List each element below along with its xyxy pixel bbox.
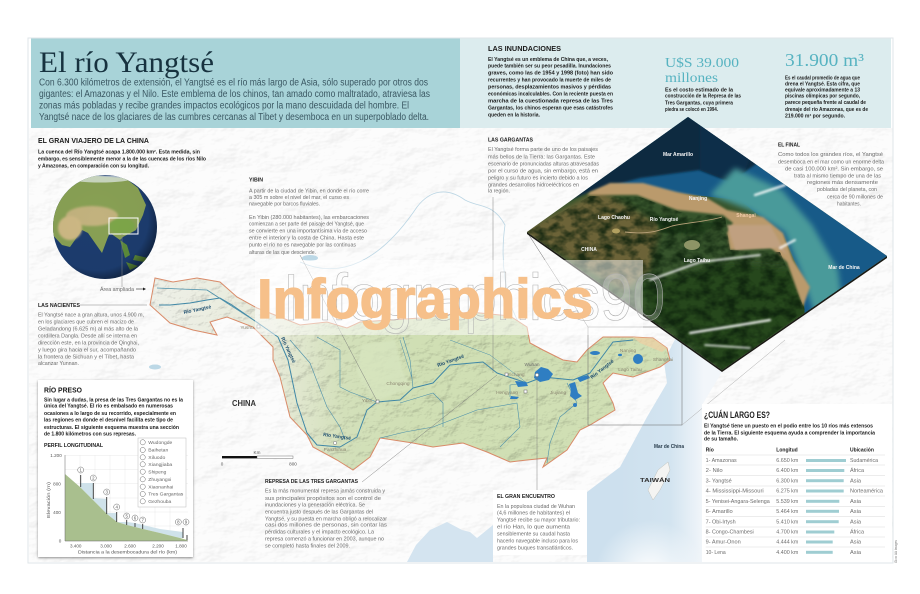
lakes (510, 351, 643, 407)
text: El final (778, 143, 884, 207)
city labels: Jiujiang (550, 390, 566, 396)
text: Las nacientes: la frontera de Sichuan y el Tíbet, hasta (38, 354, 134, 360)
panel: El gran encuentro: grandes buques transatlánticos. (497, 546, 573, 552)
text: Las nacientes: El Yangtsé nace a gran altura, unos 4.900 m, (38, 312, 144, 318)
text: Las nacientes: dirección este, en la provincia de Qinghai, (38, 340, 139, 346)
dam numbers: 3 (105, 490, 108, 495)
panel: El gran encuentro: Yangtsé recibe su mayor tributario: (497, 518, 580, 524)
text: El final: desemboca en el mar como un enorme delta (778, 160, 884, 166)
text: Las nacientes: en los glaciares que cubren el macizo de (38, 320, 134, 326)
intro text (39, 78, 430, 123)
panel: ¿Cuán largo es?: de la Tierra. El siguiente esquema ayuda a comprender la importancia (704, 430, 875, 436)
panel: Las inundaciones: económicas incalculables. Con la reciente puesta en (488, 91, 613, 97)
dams (81, 475, 187, 540)
panel: cost of the dam (665, 56, 741, 113)
panel: Las inundaciones: puede también ser su peor pesadilla. Inundaciones (488, 64, 611, 70)
table of rivers: Ubicación (850, 448, 874, 454)
satellite labels: Nanjing (689, 196, 707, 202)
panel: Las inundaciones: graves, como las de 1954 y 1998 (foto) han sido (488, 70, 613, 76)
table of rivers: 6.275 km (776, 489, 798, 495)
panel: average flow: equivale aproximadamente a 13 (785, 87, 860, 93)
satellite labels: Río Yangtsé (650, 217, 678, 223)
Yangtsé basin outline (150, 278, 670, 470)
table of rivers: 7- Obi-Irtysh (706, 519, 736, 525)
text: Las nacientes: y luego gira hacia el sur, acompañando (38, 347, 136, 353)
intro text: gigantes: el Amazonas y el Nilo. Este emblema de los chinos, tan amado como maltratado, atraviesa las (39, 89, 430, 100)
dam legend: Baihetan (148, 448, 169, 453)
table of rivers: 8- Congo-Chambesi (706, 530, 754, 536)
watermark: Infographics90 (283, 260, 665, 334)
panel: El gran encuentro (493, 490, 587, 555)
table of rivers: 4.400 km (776, 550, 798, 556)
dam numbers: 4 (115, 505, 118, 510)
delta inset frame (527, 232, 785, 425)
text: Las gargantas: peligro y su futuro es incierto debido a los (488, 176, 588, 182)
city labels: Chongqing (386, 381, 410, 387)
table of rivers: Norteamérica (850, 489, 883, 495)
axis labels: 3.400 (70, 544, 82, 548)
city labels: Yibin (362, 398, 373, 404)
enlarged area rectangle (109, 218, 138, 234)
panel: cost of the dam: U$S 39.000 (665, 56, 739, 71)
panel: average flow: Es el caudal promedio de agua que (785, 75, 860, 81)
Sichuan plain (356, 345, 410, 398)
table of rivers: 1- Amazonas (706, 458, 737, 464)
satellite photo (527, 117, 887, 370)
dam legend: Gezhouba (148, 499, 172, 504)
text: Las gargantas: escenario de pronunciadas alturas atravesadas (488, 161, 599, 167)
text: Yibin: navegable por barcos fluviales. (249, 201, 320, 207)
text: Represa de las Tres Gargantas: Yangtsé, y su puesta en marcha obligó a relocalizar (265, 516, 387, 522)
text: El final: regiones más densamente (807, 180, 878, 186)
panel: El gran encuentro: sensiblemente su caudal hasta (497, 532, 570, 538)
text: Represa de las Tres Gargantas: encuentra justo después de las Gargantas del (265, 509, 373, 515)
dam legend: Tres Gargantas (148, 492, 184, 497)
table of rivers: Asia (850, 540, 861, 546)
city labels: Lago Taihu (618, 367, 642, 373)
panel: ¿Cuán largo es? (702, 404, 892, 563)
dam numbers (78, 467, 189, 525)
table of rivers: 5.410 km (776, 519, 798, 525)
longitudinal profile chart (46, 453, 189, 554)
text: Las nacientes: Geladandong (6.625 m) al más alto de la (38, 326, 138, 332)
axis labels: 0 (59, 538, 62, 544)
text: Las gargantas: más bellos de la Tierra: las Gargantas. Este (488, 154, 595, 160)
panel: Río preso (38, 380, 193, 557)
satellite labels: Lago Taihu (684, 258, 710, 264)
label: China: CHINA (232, 399, 256, 408)
table of rivers: Asia (850, 499, 861, 505)
photo credit: Glow AA Images (894, 540, 898, 563)
axes (65, 455, 188, 541)
lake and upper river outside basin (149, 192, 520, 370)
axis labels: 3.000 (100, 544, 112, 548)
text: Yibin: A partir de la ciudad de Yibin, en donde el río corre (249, 188, 369, 194)
text: El final: Como todos los grandes ríos, el Yangtsé (778, 152, 883, 158)
dam numbers: 7 (141, 518, 144, 523)
basin border (150, 278, 670, 470)
dam numbers: 1 (79, 468, 82, 473)
river labels: Río Yangtsé (437, 354, 465, 369)
panel: average flow: parece pequeña frente al caudal de (785, 100, 866, 106)
panel: Las inundaciones: LAS INUNDACIONES (488, 44, 561, 53)
satellite image block (527, 117, 887, 372)
panel: cost of the dam: Es el costo estimado de la (665, 87, 733, 93)
table of rivers: 6.300 km (776, 478, 798, 484)
scale bar: Km (254, 450, 261, 455)
satellite labels: Lago Chaohu (598, 215, 630, 221)
text: Yibin: a 305 m sobre el nivel del mar, el curso es (249, 195, 349, 201)
label: enlarged area (100, 234, 146, 293)
table of rivers: Asia (850, 478, 861, 484)
panel: cost of the dam: piedra se colocó en 1994. (665, 107, 719, 113)
panel: El gran encuentro: EL GRAN ENCUENTRO (497, 494, 555, 500)
text: Las gargantas: El Yangtsé forma parte de uno de los paisajes (488, 147, 598, 153)
text: Las nacientes: alcanzar Yunnan. (38, 361, 79, 367)
text: Represa de las Tres Gargantas: casi dos millones de personas, sin contar las (265, 523, 387, 529)
intro text: Con 6.300 kilómetros de extensión, el Yangtsé es el río más largo de Asia, sólo superado por otros dos (39, 78, 428, 88)
text: Yibin: se convierte en una importantísima vía de acceso (249, 228, 367, 234)
panel: average flow: 31.900 m³ (785, 50, 865, 70)
dam numbers: 5 (125, 514, 128, 519)
river labels: Río Yangtsé (279, 336, 297, 364)
rivers (157, 288, 633, 463)
table of rivers: Río (706, 448, 714, 454)
header panel: title (31, 38, 460, 128)
river labels: Río Yangtsé (183, 304, 212, 316)
panel: Las inundaciones (488, 44, 613, 118)
text: Las gargantas: la región. (488, 189, 510, 195)
city labels: Yushu (240, 325, 254, 331)
text: Yibin: alturas de las que desciende. (249, 250, 316, 256)
axis labels: 1.800 (175, 544, 187, 548)
text: Represa de las Tres Gargantas (265, 479, 387, 550)
dam numbers: 6 (134, 516, 137, 521)
dam numbers: 2 (92, 476, 95, 481)
dam legend: Xiluodo (148, 455, 166, 460)
river labels: Río Yangtsé (323, 432, 351, 442)
header panel: data (460, 38, 891, 128)
text: Yibin (249, 178, 369, 256)
intro text: zonas más pobladas y recibe grandes impactos ecológicos por la mano descuidada del hombre. El (39, 100, 409, 112)
dam legend: Xiangjiaba (148, 462, 173, 467)
axis labels: 2.200 (152, 544, 164, 548)
axis labels: 1.200 (50, 453, 62, 458)
section: El gran viajero de la China: La cuenca del Río Yangtsé acapa 1.800.000 km². Esta medida, sin (38, 150, 200, 156)
axis labels: Distancia a la desembocadura del río (km) (78, 550, 178, 554)
text: El final: habitantes. (837, 201, 861, 207)
panel: El gran encuentro: (4,6 millones de habitantes) el (497, 511, 570, 517)
text: El final: EL FINAL (778, 143, 801, 149)
text: El final: cerca de 90 millones de (827, 194, 883, 200)
text: Las nacientes (38, 303, 144, 367)
title: El río Yangtsé (39, 46, 214, 79)
panel: Las inundaciones: Gargantas, los chinos esperan que esas catástrofes (488, 105, 613, 111)
text: Las nacientes: cordillera Dangla. Desde allí se interna en (38, 333, 137, 339)
delta region (633, 337, 667, 352)
label: Taiwán: TAIWÁN (640, 477, 671, 484)
text: Las nacientes: LAS NACIENTES (38, 303, 81, 309)
table of rivers: Longitud (776, 448, 798, 454)
panel: ¿Cuán largo es?: El Yangtsé tiene un puesto en el podio entre los 10 ríos más extensos (704, 423, 873, 429)
text: Yibin: En Yibin (280.000 habitantes), las embarcaciones (249, 215, 369, 221)
dam numbers: 9 (185, 520, 188, 525)
section: El gran viajero de la China: EL GRAN VIAJERO DE LA CHINA (38, 136, 149, 145)
text: Yibin: punto el río no es navegable por las continuas (249, 243, 356, 249)
dam numbers: 8 (177, 520, 180, 525)
table of rivers: Asia (850, 550, 861, 556)
panel: Las inundaciones: recurrentes y han provocado la muerte de miles de (488, 77, 611, 83)
table of rivers: Asia (850, 509, 861, 515)
panel: average flow (785, 50, 868, 119)
text: Las gargantas: por el curso de agua, sin embargo, está en (488, 169, 598, 175)
table of rivers: 6.400 km (776, 468, 798, 474)
text: Yibin: comienzan a ser parte del paisaje del Yangtsé, que (249, 222, 364, 228)
river labels (183, 304, 615, 442)
panel: Río preso: de 1.800 kilómetros con sus represas. (44, 432, 137, 438)
dam legend (138, 438, 186, 507)
map: basin of the Yangtsé (29, 128, 893, 562)
panel: El gran encuentro: hacerlo navegable incluso para los (497, 539, 578, 545)
text: Represa de las Tres Gargantas: inundaciones y la generación eléctrica. Se (265, 502, 365, 508)
text: Yibin: entre el interior y la costa de China. Hasta este (249, 236, 364, 242)
table of rivers: Asia (850, 519, 861, 525)
table of rivers: 4.444 km (776, 540, 798, 546)
city labels: Shanghai (653, 357, 673, 363)
city labels: Yichang (507, 372, 525, 378)
satellite land texture (527, 196, 805, 372)
panel: Río preso: estructuras. El siguiente esquema muestra una sección (44, 425, 179, 431)
island: Taiwan (648, 462, 670, 500)
label: Mar de China: Mar de China (654, 444, 684, 450)
panel: Río preso: única del Yangtsé. El río es embalsado en numerosas (44, 404, 173, 410)
panel: average flow: 219.000 m³ por segundo. (785, 113, 846, 119)
city labels: Panzhihua (324, 447, 347, 453)
text: Las gargantas (488, 138, 599, 195)
city labels: Nanjing (620, 348, 636, 354)
watermark: Infographics (257, 267, 593, 330)
axis labels: 2.600 (124, 544, 136, 548)
table of rivers: 4- Mississippi-Missouri (706, 489, 764, 495)
section: El gran viajero de la China (38, 136, 206, 170)
table of rivers: 5.539 km (776, 499, 798, 505)
panel: Las inundaciones: El Yangtsé es un emblema de China que, a veces, (488, 57, 609, 63)
text: El final: trata al mismo tiempo de una de las (794, 174, 881, 180)
text: Represa de las Tres Gargantas: se completó hasta finales del 2009. (265, 544, 350, 550)
satellite labels: Mar de China (828, 265, 860, 271)
city labels (240, 325, 673, 453)
table of rivers (706, 448, 885, 556)
panel: Río preso: las regiones en donde el desnivel facilita este tipo de (44, 418, 173, 424)
intro text: Yangtsé nace de los glaciares de las cumbres cercanas al Tibet y desemboca en un superpoblado delta. (39, 112, 429, 123)
panel: average flow: drenaje del río Amazonas, que es de (785, 107, 868, 113)
text: Represa de las Tres Gargantas: Es la más monumental represa jamás construida y (265, 489, 385, 495)
panel: Las inundaciones: personas, desplazamientos masivos y pérdidas (488, 84, 611, 90)
table of rivers: 5- Yenisei-Angara-Selenga (706, 499, 770, 505)
text: Las gargantas: LAS GARGANTAS (488, 138, 534, 144)
dam legend: Shipeng (148, 469, 167, 474)
text: Represa de las Tres Gargantas: pérdidas culturales y el impacto ecológico. La (265, 530, 374, 536)
text: Represa de las Tres Gargantas: REPRESA DE LAS TRES GARGANTAS (265, 479, 359, 485)
panel: average flow: drena el Yangtsé. Esta cifra, que (785, 81, 860, 87)
axis labels: 400 (53, 510, 61, 515)
city markers (257, 325, 539, 445)
panel: Río preso: RÍO PRESO (44, 386, 82, 394)
table of rivers: Sudamérica (850, 458, 878, 464)
table of rivers: 5.464 km (776, 509, 798, 515)
leader lines (80, 197, 537, 490)
label: enlarged area: Área ampliada (100, 286, 134, 293)
city labels: Hengyang (496, 390, 518, 396)
panel: cost of the dam: Tres Gargantas, cuya primera (665, 100, 733, 106)
table of rivers: 6- Amarillo (706, 509, 733, 515)
sea: gulf (407, 522, 493, 562)
panel: ¿Cuán largo es?: de su tamaño. (704, 437, 739, 443)
axis labels (46, 453, 187, 554)
globe (50, 175, 157, 279)
city labels: Wuhan (524, 362, 540, 368)
satellite labels: Shangai (736, 213, 756, 219)
table of rivers: 3- Yangtsé (706, 478, 732, 484)
text: Yibin: YIBIN (249, 178, 263, 184)
sea: Mar de China (587, 327, 722, 562)
panel: El gran encuentro: En la populosa ciudad de Wuhan (497, 504, 575, 510)
table of rivers: 10- Lena (706, 550, 726, 556)
scale bar: 0 (221, 462, 224, 466)
panel: average flow: piscinas olímpicas por segundo, (785, 94, 861, 100)
dam legend: Xiaonanhai (148, 484, 173, 489)
panel: cost of the dam: millones (665, 71, 718, 86)
panel: El gran encuentro: el río Han, lo que aumenta (497, 525, 570, 531)
section: El gran viajero de la China: y Amazonas, en comparación con su longitud. (38, 164, 150, 170)
table of rivers: 9- Amur-Onon (706, 540, 741, 546)
panel: Río preso: Sin lugar a dudas, la presa de las Tres Gargantas no es la (44, 398, 183, 404)
panel: ¿Cuán largo es?: ¿CUÁN LARGO ES? (704, 410, 770, 420)
river labels: Río Yangtsé (590, 358, 615, 381)
scale bar (220, 451, 297, 466)
satellite labels (581, 152, 860, 271)
dam legend: Zhuyangxi (148, 477, 171, 482)
text: Represa de las Tres Gargantas: represa comenzó a funcionar en 2003, aunque no (265, 537, 384, 543)
panel: Río preso: ocasiones a lo largo de su recorrido, especialmente en (44, 411, 176, 417)
table of rivers: África (850, 529, 864, 536)
axis labels: Elevación (m) (46, 481, 51, 518)
panel: cost of the dam: construcción de la Represa de las (665, 94, 741, 100)
satellite labels: CHINA (581, 247, 597, 253)
table of rivers: 2- Nilo (706, 468, 723, 474)
axis labels: 800 (53, 482, 61, 486)
table of rivers: África (850, 467, 864, 474)
satellite labels: Mar Amarillo (663, 152, 693, 158)
panel: Río preso: PERFIL LONGITUDINAL (44, 443, 103, 449)
panel: Las inundaciones: marcha de la cuestionada represa de las Tres (488, 98, 613, 104)
land relief (29, 128, 893, 562)
scale bar: 800 (289, 462, 297, 466)
section: El gran viajero de la China: embargo, es sensiblemente menor a la de las cuencas de los ríos Nilo (38, 156, 206, 162)
dam legend: Wudongde (148, 440, 173, 445)
table of rivers: 6.650 km (776, 458, 798, 464)
text: Represa de las Tres Gargantas: sus principales propósitos son el control de (265, 496, 381, 502)
table of rivers: 4.700 km (776, 530, 798, 536)
text: El final: pobladas del planeta, con (817, 187, 877, 193)
satellite edge (527, 232, 887, 372)
text: Las gargantas: grandes desarrollos hidroeléctricos en (488, 183, 579, 189)
panel: Las inundaciones: queden en la historia. (488, 112, 541, 118)
reservoirs (80, 483, 183, 538)
sea fade at the bottom (606, 530, 686, 562)
river bed profile (65, 474, 188, 541)
text: El final: de casi 100.000 km². Sin embargo, se (785, 167, 883, 173)
